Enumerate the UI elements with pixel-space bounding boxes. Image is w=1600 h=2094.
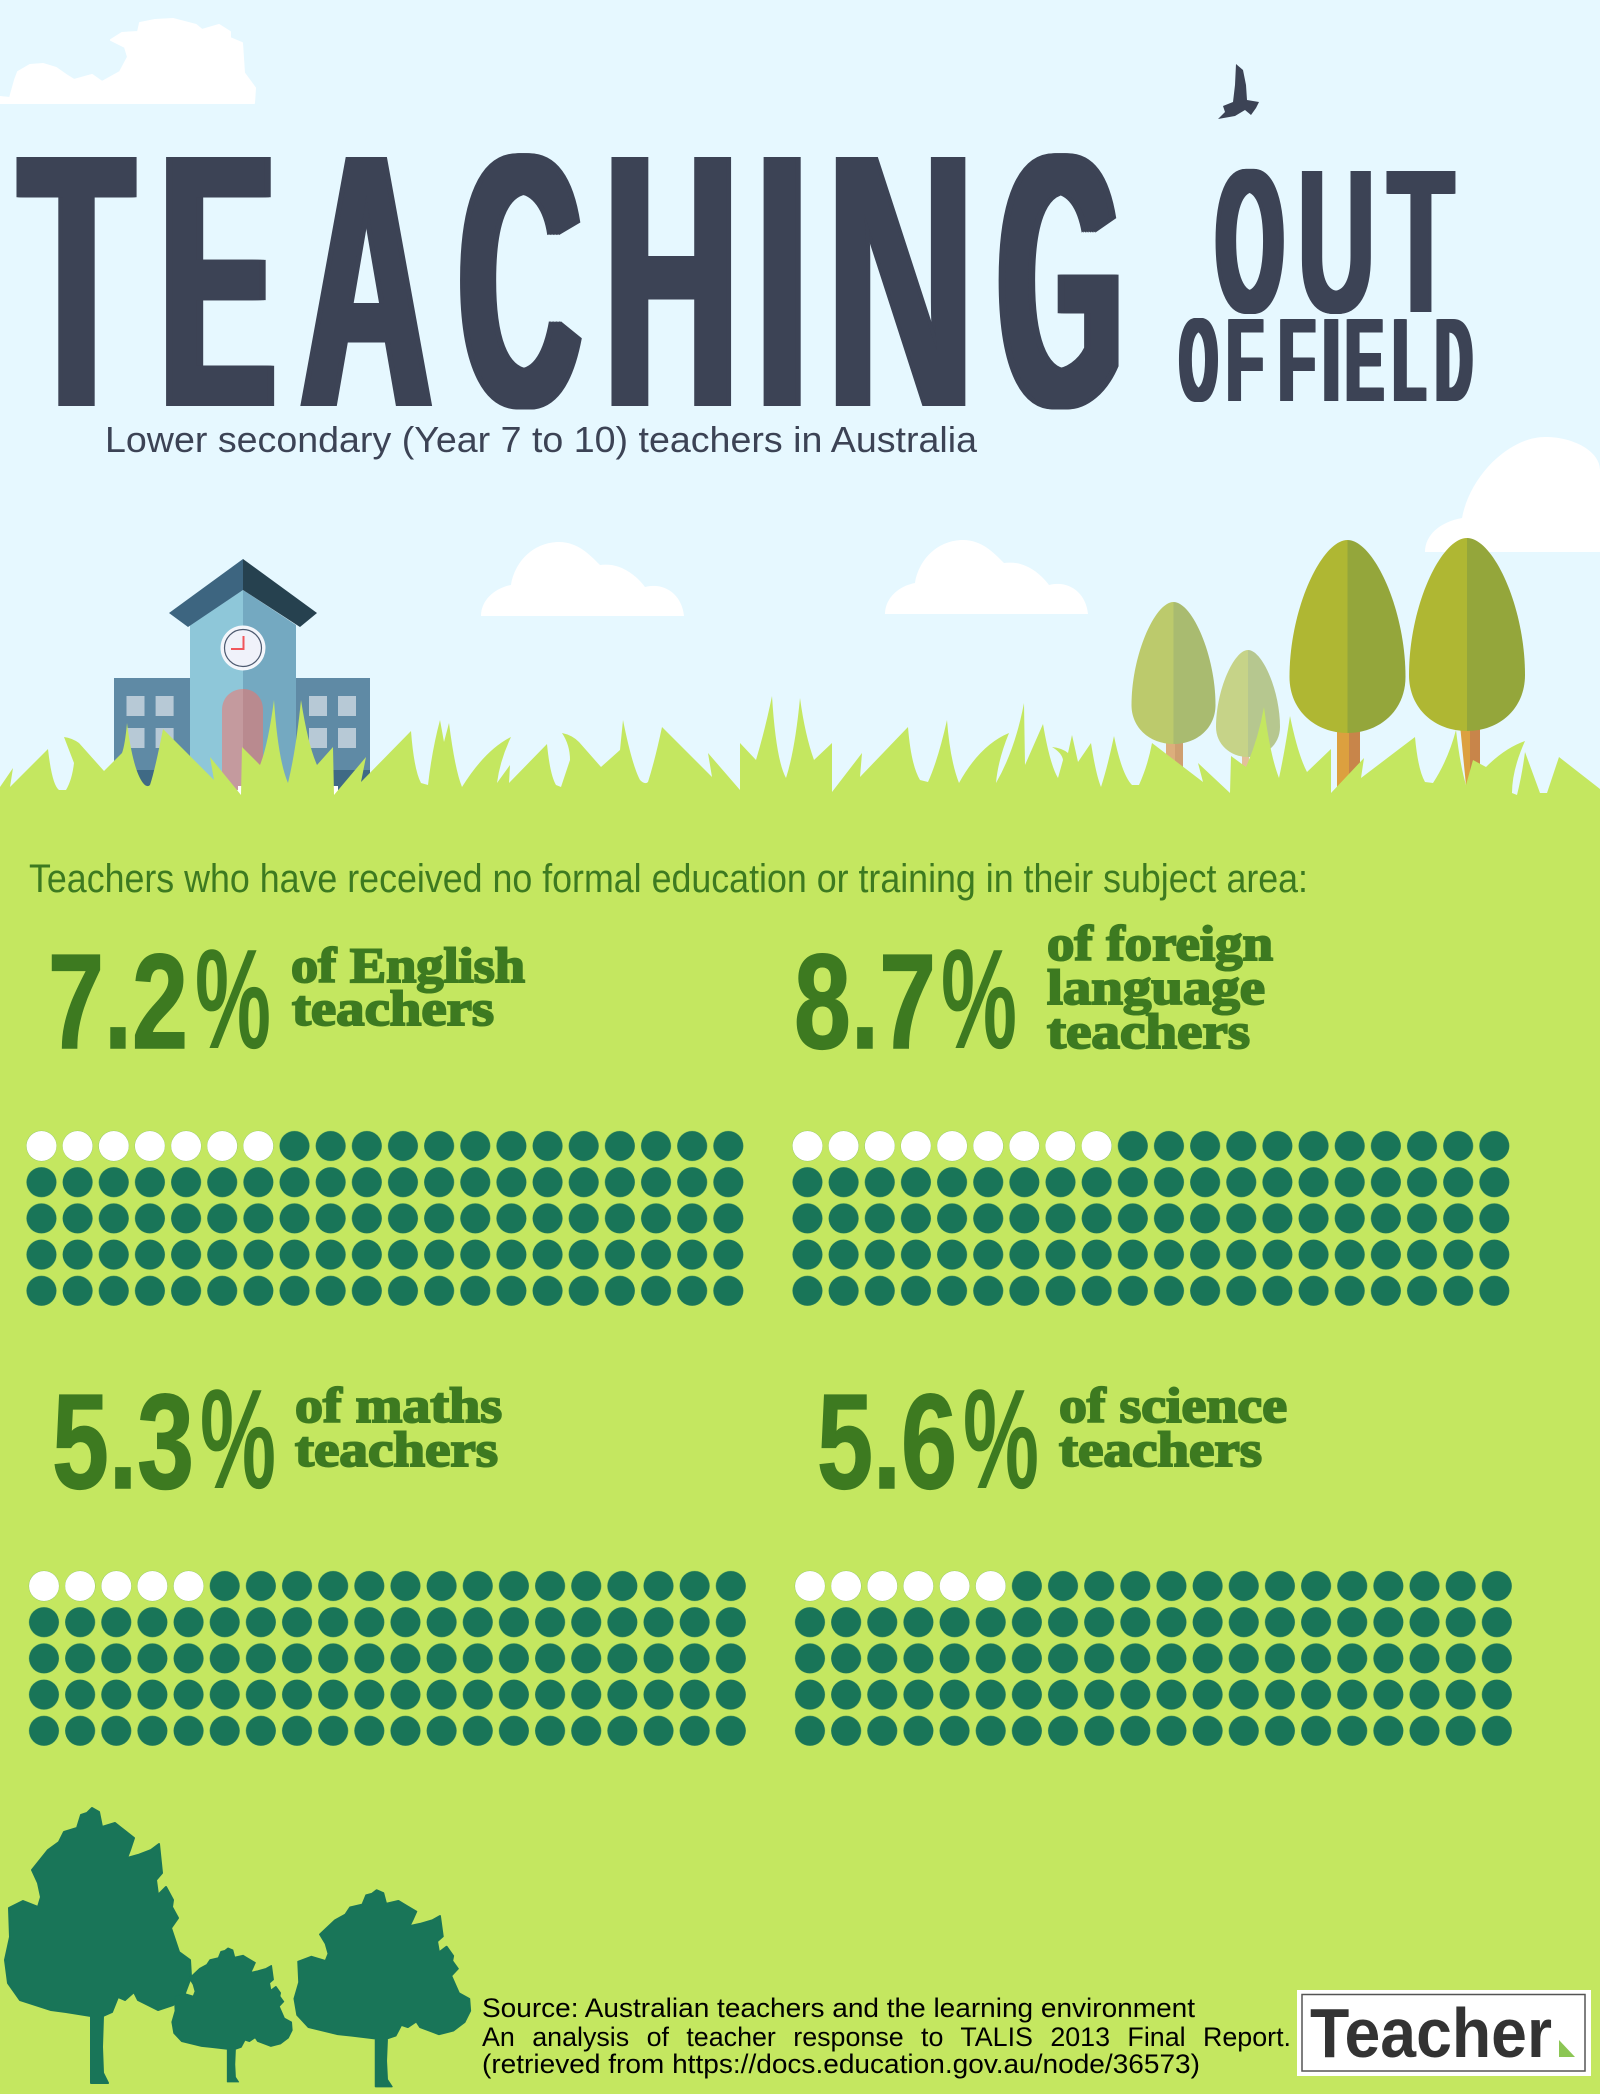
panel: foreign language (789, 915, 1512, 1309)
title: TEACHING: I (757, 78, 808, 483)
label: of English teachers (291, 937, 525, 1036)
label: of foreign language teachers: teachers (1047, 1003, 1250, 1059)
cloud: centre right (885, 540, 1088, 614)
source note: An analysis of teacher response to TALIS 2013 Final Report. (482, 2022, 1291, 2052)
percent sign: % (200, 1360, 276, 1519)
subtitle: Lower secondary (Year 7 to 10) teachers in Australia (105, 419, 978, 460)
label: of maths teachers (295, 1377, 502, 1477)
grass field (0, 696, 1600, 2094)
school building (114, 559, 370, 798)
label: of science teachers: of science (1059, 1377, 1287, 1433)
dot grid: 7 of 100 white (23, 1128, 746, 1309)
icon: eagle (1218, 64, 1259, 119)
label: of maths teachers: teachers (295, 1421, 498, 1477)
tree silhouette: right (294, 1890, 470, 2087)
title: OUT: U (1298, 126, 1375, 356)
percentage: 5.6: 5.6 (817, 1366, 957, 1517)
label: of science teachers: teachers (1059, 1421, 1262, 1477)
percent sign: % (963, 1360, 1039, 1519)
title: OF FIELD: E (1345, 294, 1384, 427)
logo: Teacher: Teacher (1310, 1994, 1552, 2072)
source note: Source: Australian teachers and the learning environment (482, 1993, 1196, 2023)
panel: science (792, 1360, 1515, 1749)
title: OF FIELD: F (1278, 294, 1316, 427)
tree silhouette: small middle (172, 1948, 292, 2082)
title: OF FIELD: F (1226, 294, 1264, 427)
title: OF FIELD: L (1393, 294, 1426, 427)
title: OF FIELD: I (1323, 294, 1340, 427)
source note (482, 1993, 1291, 2079)
tree: large right (1409, 538, 1525, 785)
title: TEACHING: G (999, 78, 1121, 483)
label: of science teachers (1059, 1377, 1287, 1477)
cloud: top left (0, 19, 255, 103)
label: of English teachers: teachers (292, 980, 494, 1036)
panel: English (23, 920, 746, 1309)
cloud: far right (1425, 437, 1600, 552)
panel: maths (26, 1360, 749, 1749)
dot grid: 9 of 100 white (789, 1128, 1512, 1309)
source note: (retrieved from https://docs.education.gov.au/node/36573) (482, 2049, 1200, 2079)
title: TEACHING: E (161, 78, 274, 483)
title: OUT: T (1388, 126, 1453, 356)
title: TEACHING: C (459, 78, 581, 483)
title: TEACHING (16, 78, 1121, 483)
percentage: 5.3: 5.3 (52, 1366, 194, 1517)
tree: large left (1290, 540, 1406, 795)
percent sign: % (195, 920, 271, 1079)
title: TEACHING: N (826, 78, 975, 483)
title: OF FIELD: D (1436, 294, 1472, 427)
title: TEACHING: T (19, 78, 134, 483)
cloud: centre left (481, 542, 684, 616)
label: of foreign language teachers: of foreign (1047, 915, 1273, 971)
tree silhouette: left (5, 1808, 191, 2083)
title: OF FIELD (1178, 294, 1473, 427)
label: of maths teachers: of maths (295, 1377, 502, 1433)
dot grid: 6 of 100 white (792, 1568, 1515, 1749)
title: TEACHING: A (301, 78, 432, 483)
tree: palest small (1216, 650, 1280, 773)
percentage: 8.7: 8.7 (794, 926, 936, 1077)
label: of foreign language teachers: language (1047, 959, 1265, 1015)
title: OUT (1216, 126, 1456, 356)
dot grid: 5 of 100 white (26, 1568, 749, 1749)
label: of foreign language teachers (1047, 915, 1273, 1059)
title: OUT: O (1216, 126, 1284, 356)
label: of English teachers: of English (291, 937, 525, 993)
heading: teachers with no training: Teachers who have received no formal education or training in their subject area: (29, 857, 1308, 901)
title: OF FIELD: O (1180, 294, 1217, 427)
tree: light small (1132, 602, 1216, 770)
percent sign: % (941, 920, 1017, 1079)
percentage: 7.2: 7.2 (48, 926, 188, 1077)
title: TEACHING: H (604, 78, 738, 483)
